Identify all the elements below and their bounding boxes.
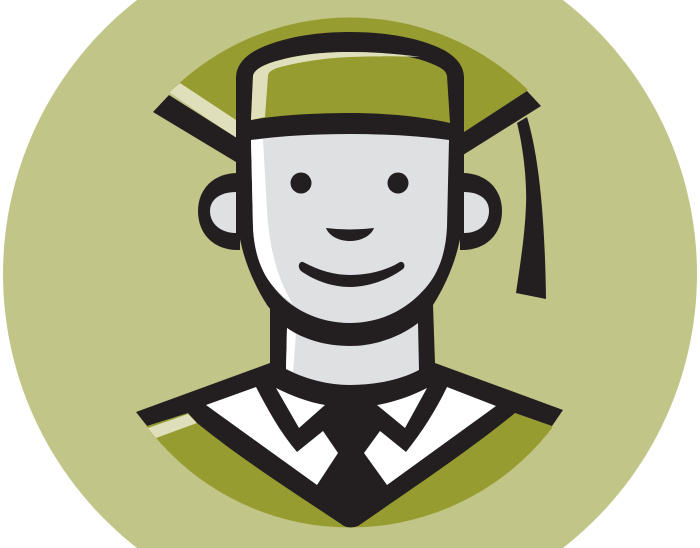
body and jacket: [130, 305, 570, 540]
cap highlight: [251, 52, 420, 120]
face highlight: [251, 139, 293, 304]
tassel: [516, 117, 546, 299]
shoulder highlight: [148, 414, 197, 438]
face: [251, 134, 449, 323]
cap crown: [251, 52, 450, 123]
shirt collar: left outer: [206, 387, 338, 485]
nose: [326, 228, 374, 241]
eye: left: [290, 172, 312, 194]
shirt collar: right outer: [364, 387, 496, 485]
jacket fabric: [147, 413, 552, 528]
mortarboard brim: [153, 95, 240, 163]
eye: right: [388, 172, 408, 194]
neck highlight: [286, 328, 296, 372]
mortarboard top: [170, 18, 528, 138]
head outline: [236, 32, 464, 347]
ear: left: [198, 173, 240, 250]
jacket outline: [136, 305, 563, 528]
neck: [286, 323, 419, 385]
shirt collar: left inner: [276, 388, 325, 428]
mortarboard right brim: [460, 91, 541, 155]
ear: right: [460, 173, 502, 250]
smile: [299, 262, 404, 287]
shirt collar: right inner: [377, 388, 427, 428]
